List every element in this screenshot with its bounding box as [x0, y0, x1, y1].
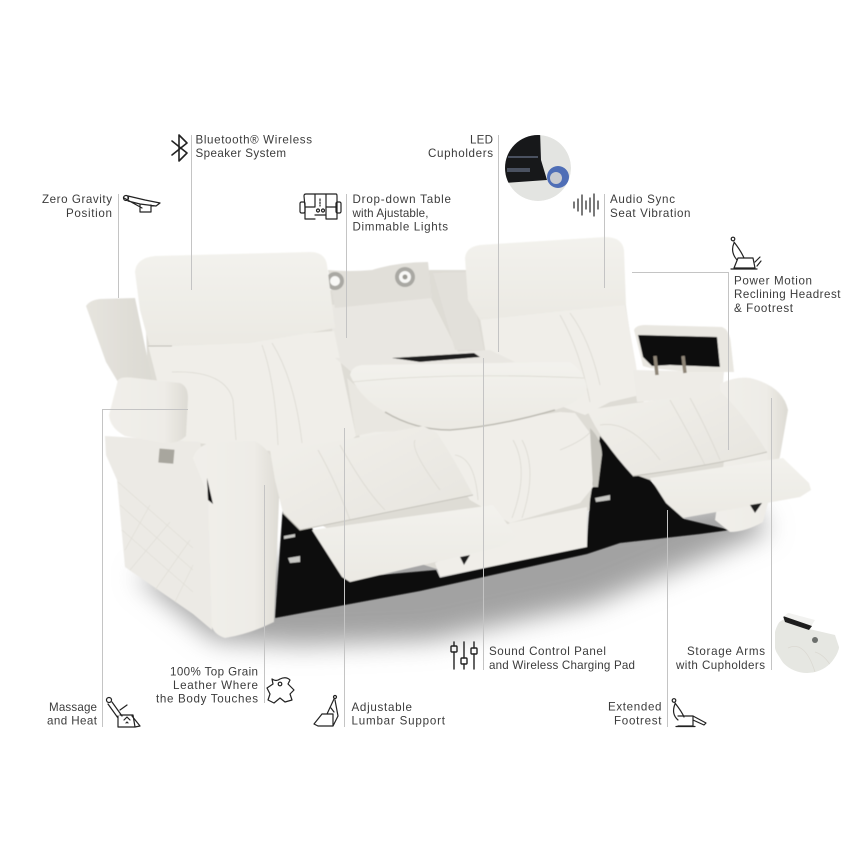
- leader line: sound control: [482, 358, 484, 670]
- icon: bluetooth: [172, 135, 187, 161]
- text: LED cupholders: [428, 134, 493, 160]
- sofa: left arm outer side panel: [105, 436, 212, 630]
- leader line: power motion: [632, 272, 728, 450]
- icon: power recliner: [731, 237, 761, 269]
- text: extended footrest: Footrest: [614, 714, 662, 728]
- text: lumbar support: [352, 701, 446, 728]
- text: power motion: [734, 274, 841, 315]
- text: bluetooth speaker: [196, 134, 312, 160]
- sofa: left footrest: [312, 505, 517, 582]
- text: power motion: Reclining Headrest: [734, 288, 841, 301]
- sofa: mechanism highlights: [284, 495, 610, 563]
- text: drop-down table: with Ajustable,: [352, 207, 428, 220]
- sofa: right storage arm base: [633, 370, 724, 402]
- text: leather: [156, 666, 258, 706]
- text: lumbar support: Lumbar Support: [352, 714, 446, 728]
- sofa: drop-down table: [335, 350, 515, 375]
- sofa: center fold-down armrest cushion: [350, 362, 587, 430]
- text: bluetooth speaker: Bluetooth® Wireless: [196, 134, 312, 146]
- sofa: left arm side control plate: [158, 448, 174, 464]
- text: power motion: & Footrest: [734, 302, 794, 315]
- text: storage arms: Storage Arms: [687, 645, 765, 658]
- photo: LED cupholder closeup: [505, 135, 571, 201]
- text: LED cupholders: Cupholders: [428, 147, 493, 160]
- sofa: left seat: [270, 426, 473, 530]
- icon: massage chair: [106, 698, 140, 727]
- text: sound control: Sound Control Panel: [489, 645, 606, 658]
- text: zero gravity: Position: [66, 207, 112, 220]
- text: storage arms: with Cupholders: [675, 659, 765, 672]
- text: audio sync: Audio Sync: [610, 193, 675, 206]
- sofa: right arm: [715, 378, 788, 532]
- sofa: center seat: [355, 405, 593, 523]
- sofa: left rear wing: [86, 298, 152, 382]
- text: leather: Leather Where: [173, 679, 258, 692]
- photo: storage arm closeup: [775, 613, 839, 673]
- sofa: console interior and opened speaker panel: [326, 262, 484, 362]
- text: LED cupholders: LED: [470, 134, 493, 146]
- sofa: shadow under center cushion: [385, 410, 555, 430]
- leader line: storage arms: [770, 398, 772, 670]
- sofa: underlay filling gaps between cushions: [145, 270, 770, 570]
- text: audio sync: Seat Vibration: [610, 207, 690, 220]
- sofa: left backrest seams: [148, 343, 302, 445]
- text: drop-down table: Drop-down Table: [352, 193, 451, 206]
- icon: audio sound wave: [574, 194, 598, 216]
- text: bluetooth speaker: Speaker System: [196, 147, 286, 160]
- text: audio sync: [610, 193, 690, 220]
- text: sound control: [489, 645, 635, 672]
- leader line: extended footrest: [666, 510, 668, 727]
- text: leather: the Body Touches: [156, 692, 258, 706]
- infographic: reclining sofa with feature callouts: [42, 134, 840, 728]
- sofa: gray cylinder behind center seat: [590, 428, 602, 487]
- icon: lumbar support recliner: [314, 696, 338, 726]
- sofa: center seat stitching: [455, 430, 592, 518]
- text: storage arms: [675, 645, 765, 672]
- icon: leather hide: [267, 678, 294, 703]
- icon: zero gravity chair: [124, 196, 160, 212]
- sofa: dark mechanism under seats: [275, 436, 730, 618]
- text: power motion: Power Motion: [734, 274, 812, 288]
- leader line: drop-down table: [346, 194, 348, 338]
- sofa: right backrest seams: [560, 313, 600, 402]
- floor shadow: [135, 500, 770, 645]
- text: sound control: and Wireless Charging Pad: [489, 659, 635, 672]
- text: leather: 100% Top Grain: [170, 666, 258, 678]
- text: massage and heat: Massage: [49, 701, 97, 714]
- sofa: right seat front edge: [633, 452, 767, 476]
- sofa: left headrest: [135, 252, 335, 347]
- panel: sofa: [86, 237, 811, 638]
- leader line: audio sync: [604, 194, 606, 288]
- text: massage and heat: [47, 701, 98, 728]
- sofa: left rear armrest pad: [109, 377, 188, 443]
- leader line: adjustable lumbar: [344, 428, 346, 727]
- sofa: right storage arm open lid: [634, 325, 734, 375]
- text: drop-down table: Dimmable Lights: [352, 220, 448, 234]
- text: extended footrest: [608, 700, 662, 728]
- icon: extended footrest recliner: [672, 699, 706, 726]
- text: lumbar support: Adjustable: [352, 701, 412, 714]
- text: massage and heat: and Heat: [47, 714, 98, 728]
- leader line: bluetooth: [190, 135, 192, 290]
- sofa: quilted diamond stitching: [118, 482, 193, 602]
- text: zero gravity: [42, 193, 112, 220]
- sofa: left seat stitching: [318, 440, 440, 520]
- sofa: right seat: [587, 391, 767, 476]
- leader line: top grain leather: [264, 485, 266, 703]
- text: drop-down table: [352, 193, 451, 234]
- icon: control sliders: [451, 642, 477, 669]
- text: extended footrest: Extended: [608, 700, 662, 714]
- sofa: left backrest: [148, 331, 356, 452]
- sofa: right footrest: [650, 458, 811, 518]
- sofa: right headrest: [465, 237, 626, 320]
- leader line: LED cupholders: [498, 135, 500, 352]
- leader line: zero gravity: [118, 194, 120, 298]
- sofa: left seat front edge: [283, 495, 473, 530]
- leader line: massage and heat: [102, 410, 188, 727]
- sofa: right backrest: [480, 304, 640, 415]
- icon: sofa with console: [300, 194, 341, 219]
- sofa: left side cushion under armrest: [347, 378, 440, 436]
- sofa: footrest release notch: [460, 555, 470, 565]
- sofa: left front arm: [193, 441, 280, 638]
- sofa: center front base: [435, 507, 587, 577]
- text: zero gravity: Zero Gravity: [42, 193, 112, 206]
